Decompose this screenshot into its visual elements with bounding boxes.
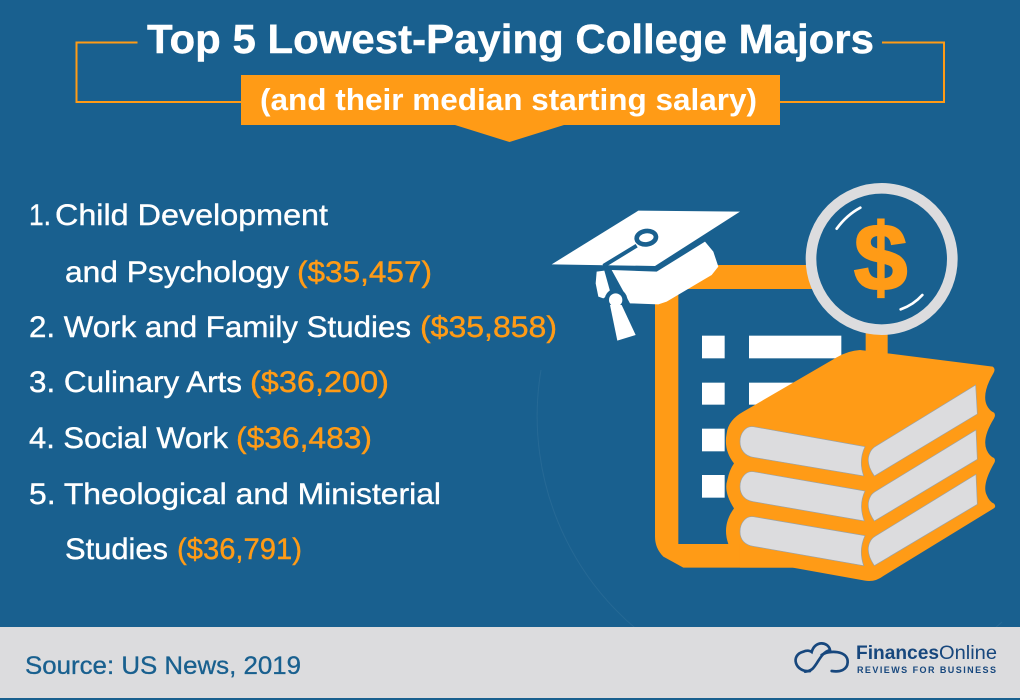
- logo: FinancesOnline: Finances: [856, 643, 939, 664]
- icon: checklist board: [655, 265, 841, 568]
- major 2: [29, 311, 557, 344]
- major 3: 3. Culinary Arts: [29, 366, 242, 399]
- book 3 pages: [740, 474, 977, 566]
- major 1: ($35,457): [297, 256, 432, 289]
- illustration: checklist, magnifier, cap and books: [552, 188, 995, 581]
- major 4: ($36,483): [236, 422, 372, 455]
- major 1: and Psychology: [65, 256, 289, 289]
- subtitle: (and their median starting salary): [260, 82, 757, 117]
- major 5: ($36,791): [177, 533, 302, 566]
- major 5: 5. Theological and Ministerial: [29, 478, 441, 511]
- list of majors: [29, 199, 557, 566]
- title bracket: [76, 42, 944, 102]
- major 1: [29, 199, 432, 289]
- major 4: 4. Social Work: [29, 422, 229, 455]
- major 4: [29, 422, 372, 455]
- book 1 pages: [740, 385, 977, 476]
- title: Top 5 Lowest-Paying College Majors: [147, 16, 874, 62]
- icon: stack of books: [726, 350, 995, 581]
- icon: graduation cap: [552, 211, 740, 341]
- subtitle banner: [241, 75, 780, 142]
- logo: FinancesOnline: REVIEWS FOR BUSINESS: [857, 665, 996, 675]
- major 2: ($35,858): [420, 311, 557, 344]
- source text: Source: US News, 2019: [25, 652, 301, 680]
- major 3: ($36,200): [250, 366, 389, 399]
- book 2 pages: [740, 430, 977, 521]
- major 3: [29, 366, 389, 399]
- icon: magnifying glass with dollar sign: $: [854, 205, 907, 311]
- logo: FinancesOnline: Online: [939, 643, 997, 664]
- title header: [76, 16, 944, 142]
- major 1: Child Development: [55, 199, 329, 232]
- major 2: 2. Work and Family Studies: [29, 311, 411, 344]
- major 5: [29, 478, 441, 566]
- footer band: [0, 627, 1020, 700]
- major 1: 1.: [29, 199, 51, 232]
- icon: magnifying glass with dollar sign: [811, 188, 952, 360]
- major 5: Studies: [65, 533, 168, 566]
- logo: FinancesOnline: [796, 643, 997, 675]
- icon: cloud: [796, 643, 848, 672]
